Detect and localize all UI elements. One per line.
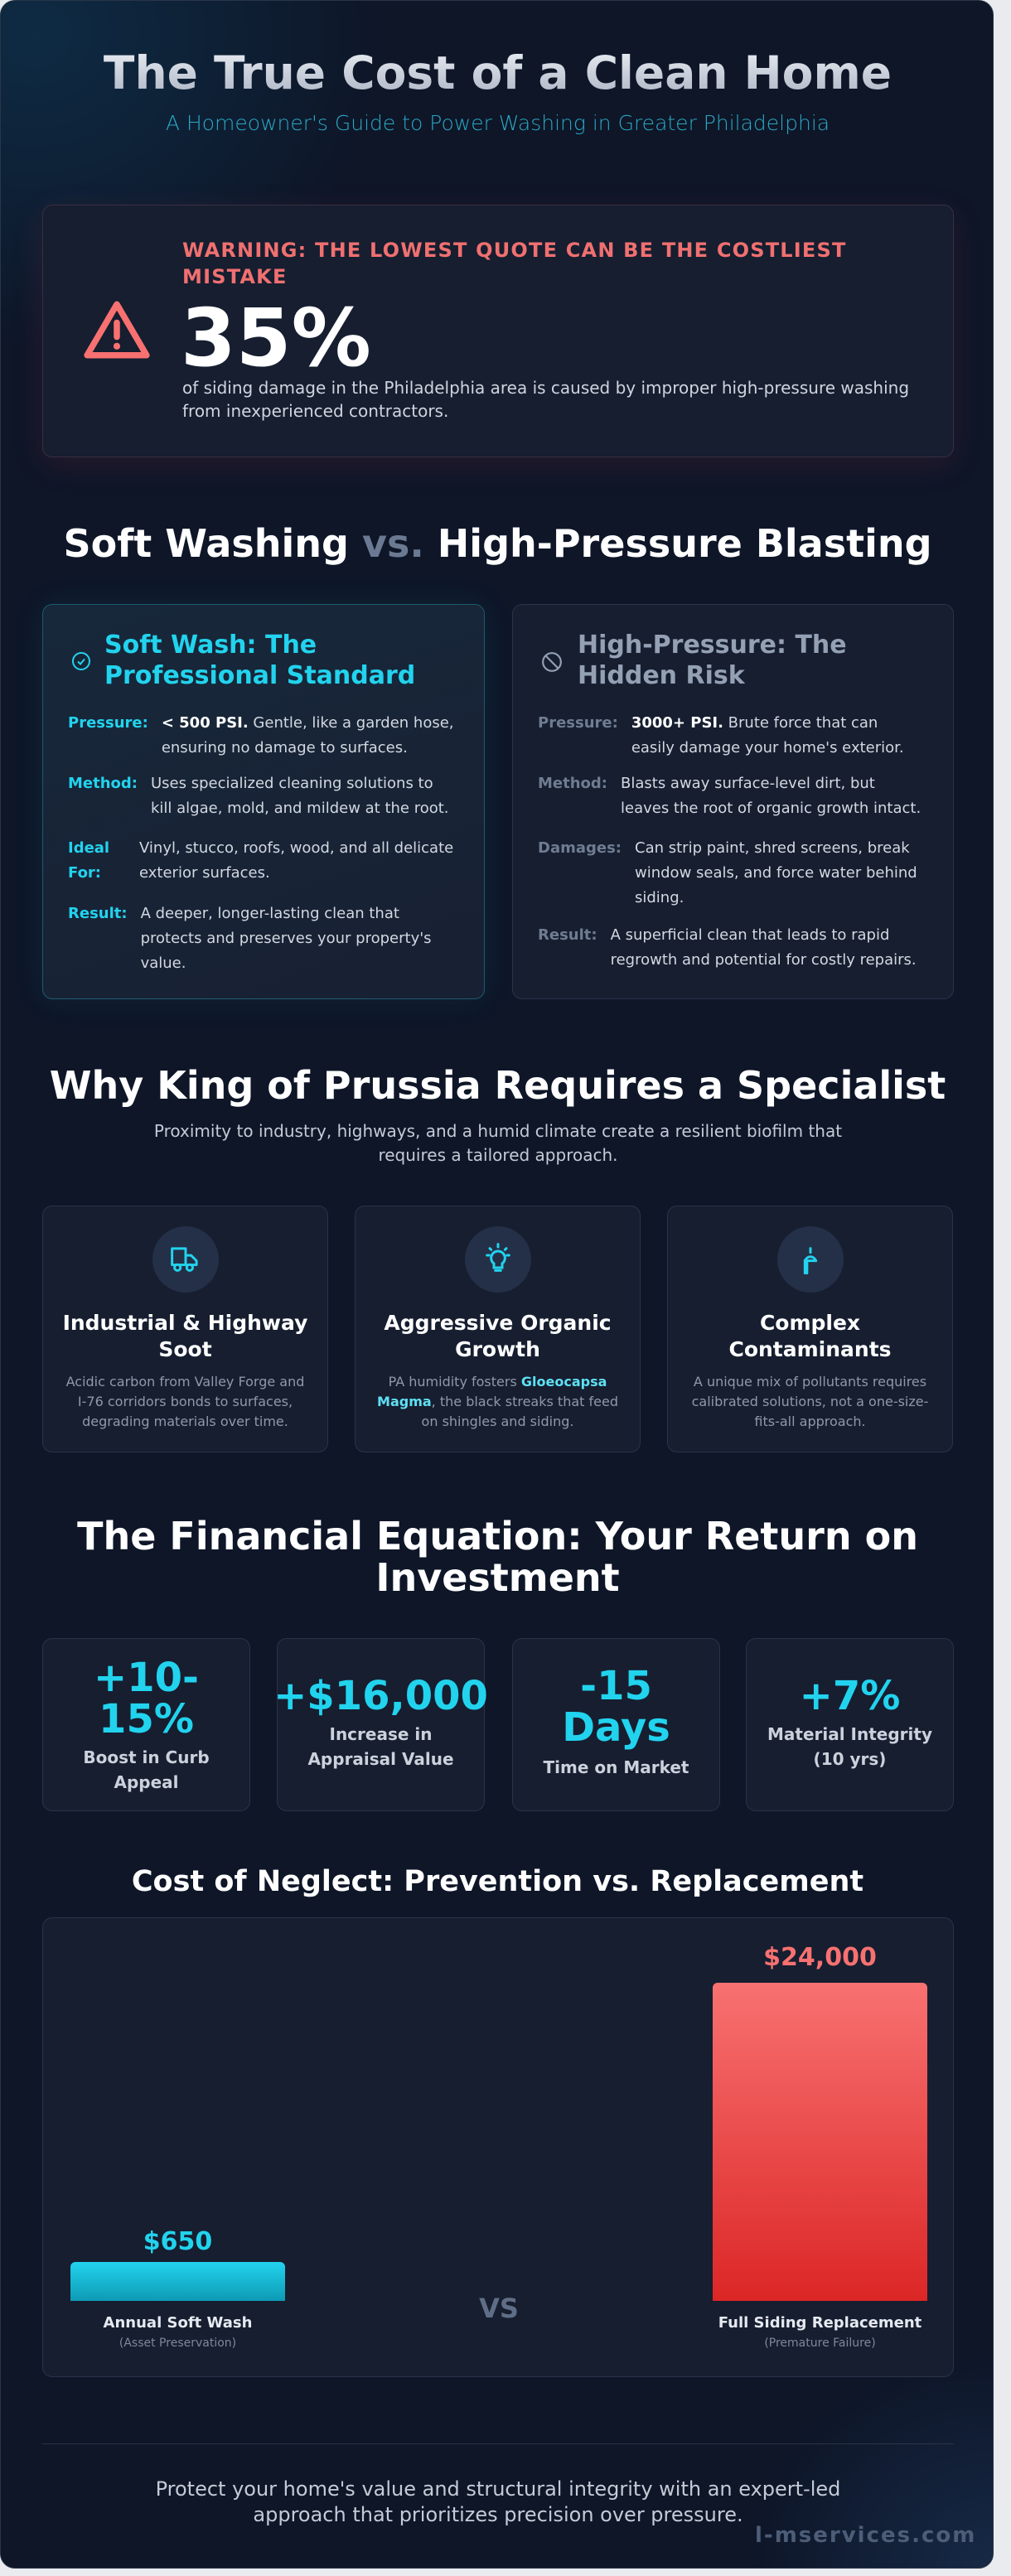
bar: annual soft wash: $650: [143, 2227, 212, 2256]
row: pressure: 3000+ PSI. Brute force that can: [631, 714, 878, 732]
bar chart panel: [42, 1917, 954, 2377]
stat: curb appeal: Appeal: [114, 1772, 179, 1792]
stat: curb appeal: 15%: [99, 1696, 194, 1742]
icon: warning triangle: [84, 302, 150, 358]
row: pressure: Pressure:: [68, 714, 148, 732]
heading: cost of neglect: Cost of Neglect: Prevention vs. Replacement: [132, 1865, 863, 1898]
card: industrial soot: [42, 1206, 328, 1452]
stat: curb appeal: Boost in Curb: [83, 1747, 210, 1767]
vs label: VS: [479, 2293, 519, 2324]
row: result: [68, 905, 432, 972]
row: damages: Can strip paint, shred screens, break: [635, 839, 910, 857]
card: organic growth: PA humidity fosters Gloeocapsa Magma, the black streaks that feed on shingles and siding.: [377, 1374, 618, 1429]
big stat 35%: 35%: [181, 292, 371, 384]
stat: appraisal: [277, 1638, 485, 1811]
stat: curb appeal: +10-: [94, 1655, 199, 1701]
row: method: Blasts away surface-level dirt, but: [621, 775, 875, 792]
stat: appraisal: Appraisal Value: [307, 1749, 454, 1769]
row: result: [538, 926, 917, 969]
icon: truck: [152, 1226, 219, 1293]
footer text: Protect your home's value and structural integrity with an expert-led approach that prioritizes precision over pressure.: [156, 2477, 840, 2526]
row: damages: window seals, and force water behind: [635, 864, 917, 882]
row: method: Method:: [68, 775, 138, 792]
stat: days on market: -15: [580, 1663, 652, 1709]
icon: check circle: [72, 652, 90, 670]
bar: full siding replacement: Full Siding Replacement: [718, 2314, 922, 2332]
title: [1, 42, 994, 104]
stat: days on market: [512, 1638, 720, 1811]
row: result: A deeper, longer-lasting clean that: [141, 905, 399, 922]
stat: days on market: Days: [562, 1704, 670, 1751]
row: result: protects and preserves your property's: [141, 930, 432, 947]
row: method: [538, 775, 921, 817]
icon: bulb: [465, 1226, 531, 1293]
row: pressure: < 500 PSI. Gentle, like a garden hose,: [162, 714, 454, 732]
warning description: of siding damage in the Philadelphia area is caused by improper high-pressure washing from inexperienced contractors.: [182, 378, 909, 421]
card: organic growth: Aggressive Organic Growth: [384, 1311, 612, 1361]
row: damages: Damages:: [538, 839, 622, 857]
card: industrial soot: Acidic carbon from Valley Forge and I-76 corridors bonds to surfaces, degrading materials over time.: [66, 1374, 304, 1429]
bar: full siding replacement: $24,000: [763, 1943, 877, 1972]
row: pressure: easily damage your home's exterior.: [631, 739, 904, 756]
title: The True Cost of a Clean Home: [104, 46, 892, 99]
row: method: kill algae, mold, and mildew at the root.: [151, 800, 449, 817]
card: contaminants: A unique mix of pollutants requires calibrated solutions, not a one-size-fits-all approach.: [692, 1374, 928, 1429]
row: result: value.: [141, 955, 186, 972]
heading: soft washing vs high pressure: Soft Washing vs. High-Pressure Blasting: [63, 521, 932, 566]
subtitle: A Homeowner's Guide to Power Washing in Greater Philadelphia: [166, 111, 830, 135]
stat: material integrity: [746, 1638, 954, 1811]
row: pressure: [538, 714, 904, 756]
card: industrial soot: Industrial & Highway Soot: [63, 1311, 307, 1361]
soft wash heading: Soft Wash: The Professional Standard: [104, 631, 415, 690]
bar: annual soft wash: (Asset Preservation): [119, 2337, 236, 2350]
row: method: leaves the root of organic growth intact.: [621, 800, 921, 817]
stat: days on market: Time on Market: [544, 1757, 689, 1777]
row: ideal for: Vinyl, stucco, roofs, wood, and all delicate: [139, 839, 453, 857]
stat: material integrity: +7%: [800, 1673, 900, 1719]
stat: appraisal: +$16,000: [273, 1673, 488, 1719]
brand url: l-mservices.com: [755, 2523, 976, 2548]
row: result: regrowth and potential for costly repairs.: [611, 951, 917, 969]
bar: annual soft wash: Annual Soft Wash: [104, 2314, 252, 2332]
row: method: Method:: [538, 775, 607, 792]
panel: soft wash: [42, 604, 485, 999]
row: ideal for: Ideal For:: [68, 839, 109, 882]
card: contaminants: [667, 1206, 953, 1452]
row: ideal for: [68, 839, 453, 882]
warning heading: WARNING: THE LOWEST QUOTE CAN BE THE COSTLIEST MISTAKE: [182, 239, 847, 288]
stat: curb appeal: [42, 1638, 250, 1811]
stat: appraisal: Increase in: [330, 1724, 432, 1744]
stat: material integrity: Material Integrity: [767, 1724, 932, 1744]
row: pressure: Pressure:: [538, 714, 618, 732]
row: damages: siding.: [635, 889, 684, 906]
card: contaminants: Complex Contaminants: [728, 1311, 892, 1361]
bar: full siding replacement: [713, 1943, 927, 2350]
row: damages: [538, 839, 917, 906]
heading: why king of prussia: Why King of Prussia Requires a Specialist: [50, 1063, 946, 1108]
row: method: Uses specialized cleaning solutions to: [151, 775, 433, 792]
intro text: Proximity to industry, highways, and a humid climate create a resilient biofilm that requires a tailored approach.: [154, 1121, 842, 1165]
panel: warning callout: [42, 205, 954, 457]
row: result: Result:: [538, 926, 597, 944]
icon: ban: [542, 652, 562, 672]
row: pressure: [68, 714, 454, 756]
row: result: A superficial clean that leads to rapid: [611, 926, 889, 944]
bar: annual soft wash: [70, 2227, 285, 2350]
stat: material integrity: (10 yrs): [814, 1749, 886, 1769]
icon: umbrella/flask: [777, 1226, 844, 1293]
row: ideal for: exterior surfaces.: [139, 864, 270, 882]
high pressure heading: High-Pressure: The Hidden Risk: [578, 631, 847, 690]
row: result: Result:: [68, 905, 128, 922]
heading: financial equation: The Financial Equation: Your Return on Investment: [77, 1514, 918, 1600]
row: pressure: ensuring no damage to surfaces.: [162, 739, 408, 756]
panel: high pressure: [512, 604, 954, 999]
bar: full siding replacement: (Premature Failure): [764, 2337, 876, 2350]
row: method: [68, 775, 449, 817]
card: organic growth: [355, 1206, 641, 1452]
